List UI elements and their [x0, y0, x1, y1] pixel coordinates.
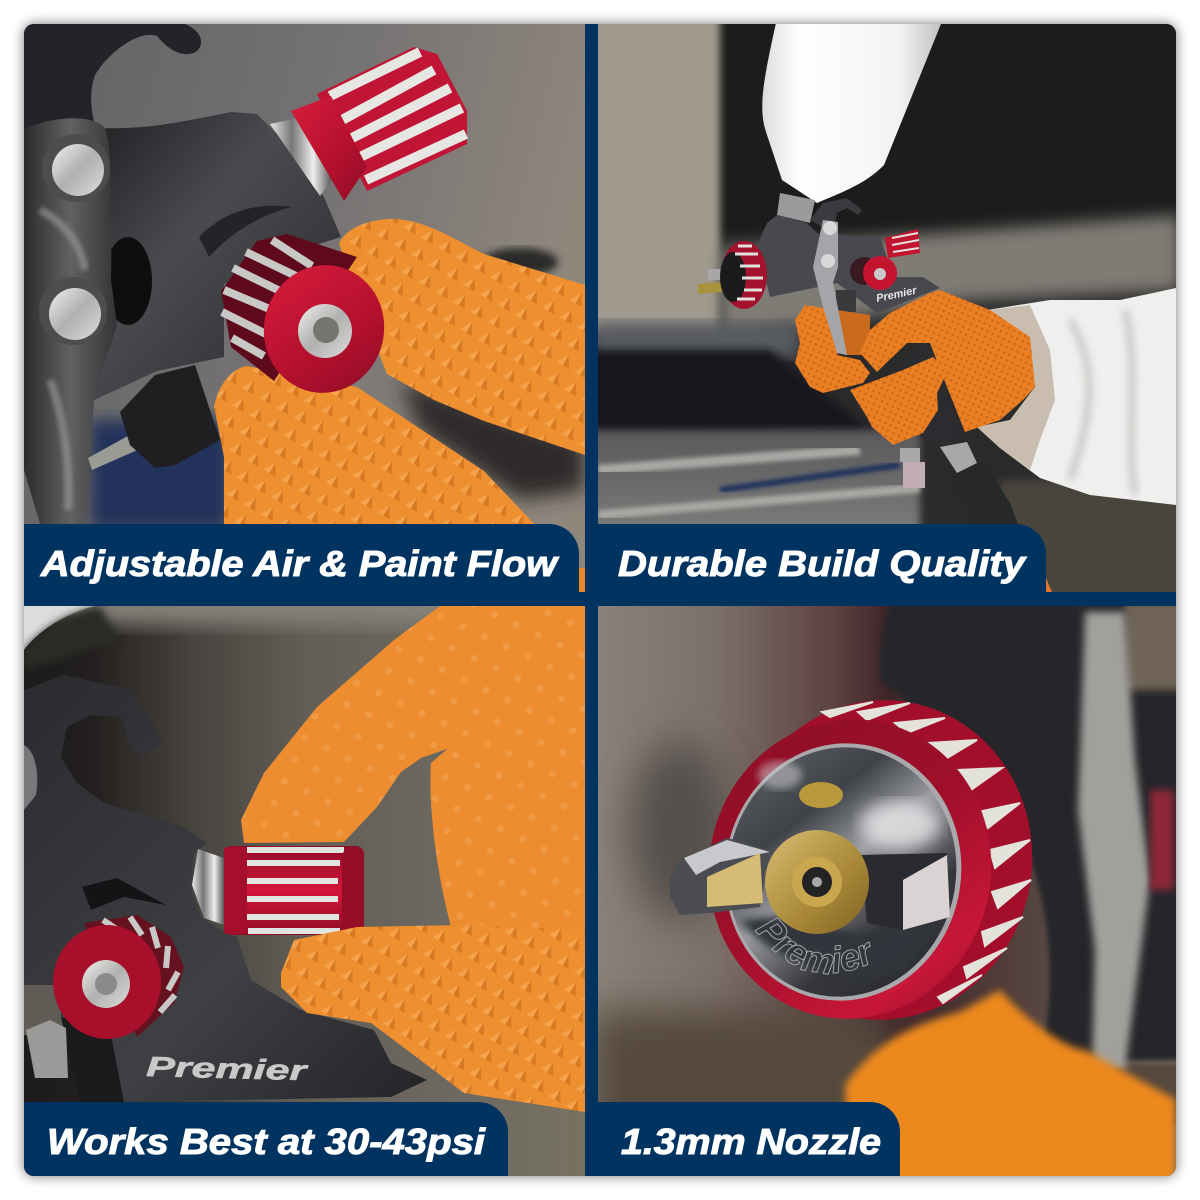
side knob ribs — [850, 257, 878, 285]
bolt collar — [42, 134, 110, 202]
lever bolt bottom — [821, 254, 835, 268]
left horn highlight — [684, 840, 770, 875]
hook — [810, 198, 862, 233]
horn bright side — [903, 855, 950, 930]
nut behind trigger — [836, 290, 856, 312]
white rib wedges — [822, 702, 1031, 1003]
blue background under gun — [90, 420, 230, 530]
front red knob — [220, 234, 384, 393]
fluid tip centre — [812, 877, 822, 887]
front cap ribs — [735, 246, 763, 299]
lower finger — [281, 925, 585, 1112]
brand name: Premier — [146, 1051, 310, 1086]
orange hand — [795, 290, 1035, 445]
dark window — [720, 24, 1176, 236]
side knob — [863, 256, 897, 290]
paint cup — [762, 14, 945, 203]
panel: 1.3mm nozzle — [598, 606, 1176, 1176]
nozzle assembly — [670, 700, 1032, 1020]
label: 1.3mm nozzle — [585, 1102, 900, 1176]
front cap — [721, 241, 767, 309]
brown lower right background — [1040, 1065, 1180, 1125]
rib highlights — [330, 52, 466, 180]
cap brand curve — [755, 930, 905, 973]
adjuster collar — [900, 448, 920, 462]
lower drawer highlight — [598, 488, 920, 515]
bolt collar — [39, 277, 107, 345]
silver washer — [82, 960, 130, 1008]
beige cabinet — [590, 10, 720, 335]
blurred background shapes — [590, 10, 1190, 600]
lower red knob — [53, 915, 184, 1039]
knob ribs — [317, 47, 467, 191]
knob ribs — [221, 234, 357, 381]
photo background — [24, 24, 585, 592]
white cup edge — [24, 606, 95, 650]
dark cup shadow — [24, 606, 120, 670]
hook and body — [24, 675, 427, 1102]
label: works best at 30-43psi — [24, 1102, 508, 1176]
front finger — [795, 305, 870, 393]
nozzle silver — [708, 269, 738, 280]
grey shelf — [720, 215, 1180, 340]
gun body — [24, 24, 341, 524]
fluid tip — [802, 867, 832, 897]
body groove — [82, 878, 166, 910]
orange hand — [241, 606, 585, 1112]
trigger tip over finger — [822, 283, 847, 355]
handle — [855, 340, 960, 450]
cup adaptor — [777, 193, 815, 223]
chrome air cap — [708, 729, 976, 1015]
knob collar — [291, 96, 367, 201]
dark blurred left background — [630, 740, 730, 920]
hex bolt — [95, 973, 117, 995]
chrome highlight — [860, 801, 940, 849]
lever bolt top — [42, 134, 110, 202]
ribbed collar — [711, 681, 1053, 1039]
orange sliver beside tab — [579, 568, 585, 592]
palm — [860, 290, 1035, 432]
silver washer — [298, 304, 352, 358]
rear knob — [885, 229, 920, 258]
label: adjustable air and paint flow — [24, 524, 579, 605]
spray gun — [698, 193, 1018, 530]
navy drawer stripe — [720, 465, 900, 490]
bolt head — [49, 288, 101, 340]
gun body — [757, 215, 940, 313]
main body — [94, 112, 341, 400]
drawer stripes — [598, 450, 860, 470]
gold badge — [799, 782, 843, 808]
curled finger texture — [430, 720, 585, 935]
knob ribs — [245, 850, 344, 931]
gun body — [24, 675, 427, 1102]
bolt head — [52, 144, 104, 196]
trigger hook — [24, 24, 202, 130]
panel: works best at 30-43psi — [24, 590, 600, 1176]
chrome lower shadow — [740, 915, 945, 976]
front cap interior — [720, 252, 746, 302]
light top backdrop — [60, 590, 600, 624]
air coupler — [950, 460, 1018, 530]
silver rim — [704, 724, 982, 1020]
brass disc — [765, 830, 869, 934]
rib highlights — [103, 917, 178, 1012]
photo background — [24, 606, 585, 1176]
hex nut — [26, 1020, 68, 1078]
blurred orange glove — [845, 990, 1176, 1190]
drawer front — [590, 430, 920, 530]
silver fitting — [940, 442, 977, 473]
lever scuffs — [40, 210, 85, 510]
brass tab — [707, 853, 763, 907]
photo background — [598, 606, 1176, 1176]
knob ribs — [84, 915, 184, 1037]
bench top — [590, 350, 870, 440]
lever bolt bottom — [39, 277, 107, 345]
label text: Adjustable Air & Paint Flow — [40, 543, 559, 584]
knob collar — [224, 847, 247, 934]
upper red knob — [291, 47, 467, 201]
back fingers — [837, 310, 870, 355]
silver neck — [270, 118, 332, 196]
blurred red knob — [1150, 790, 1174, 890]
label: durable build quality — [586, 524, 1046, 605]
panel: adjustable air and paint flow — [24, 24, 586, 594]
dark socket — [111, 237, 152, 325]
curled finger — [430, 720, 585, 935]
knob barrel — [224, 846, 364, 935]
lever bolt top — [823, 221, 837, 235]
upper finger — [339, 219, 585, 455]
chrome upper highlight — [758, 761, 802, 789]
sleeve fabric — [977, 288, 1176, 505]
label tab — [585, 1102, 900, 1176]
red bezel — [685, 697, 1015, 1041]
silver loop — [24, 745, 37, 810]
right chrome horn — [860, 853, 950, 930]
cuff — [977, 305, 1055, 470]
grey patch under gun — [24, 985, 64, 1035]
white sleeve — [977, 288, 1176, 505]
nozzle brass — [698, 282, 723, 294]
knob end ring — [342, 848, 364, 933]
lower adjuster — [900, 448, 925, 488]
rib highlights — [222, 240, 312, 356]
hex nut — [120, 365, 220, 468]
lower fingers — [850, 357, 948, 445]
label tab — [24, 524, 579, 605]
blue grey counter edge — [590, 322, 800, 358]
adjuster knob — [903, 462, 925, 488]
label tab — [24, 1102, 508, 1176]
panel: durable build quality — [590, 10, 1190, 600]
brand mark: Premier — [875, 285, 918, 305]
horizontal red knob — [224, 846, 364, 935]
cap brand name: Premier — [754, 917, 871, 975]
pointing finger — [241, 606, 585, 843]
side knob washer — [874, 268, 886, 280]
dark blurred backdrop between fingers — [400, 380, 585, 500]
blurred silver lever — [1078, 612, 1150, 1070]
label text: Works Best at 30-43psi — [47, 1121, 486, 1162]
label text: 1.3mm Nozzle — [621, 1121, 881, 1162]
dark blurred shape behind upper finger — [482, 248, 558, 276]
left chrome horn — [670, 838, 770, 915]
needle rod — [88, 436, 136, 470]
brown upper right background — [1125, 600, 1185, 690]
trigger lever — [813, 220, 847, 355]
sleeve folds — [1070, 310, 1135, 495]
body groove — [199, 206, 292, 257]
lower finger — [214, 366, 540, 530]
silver neck — [192, 849, 224, 925]
horn dark side — [860, 853, 950, 930]
knob face — [264, 265, 384, 393]
hex bolt — [313, 317, 339, 343]
label tab — [586, 524, 1046, 605]
lower body shadow — [61, 1017, 124, 1102]
silver trigger lever — [24, 118, 117, 524]
dark gun body — [879, 600, 1180, 1060]
brown lower left background — [590, 1010, 890, 1190]
orange sliver beside tab — [1046, 578, 1052, 592]
knob face — [53, 925, 161, 1039]
floor — [1000, 480, 1190, 600]
label text: Durable Build Quality — [618, 543, 1027, 584]
fluid tip ring — [792, 857, 842, 907]
rear knob ribs — [892, 233, 919, 252]
photo background — [598, 24, 1176, 524]
